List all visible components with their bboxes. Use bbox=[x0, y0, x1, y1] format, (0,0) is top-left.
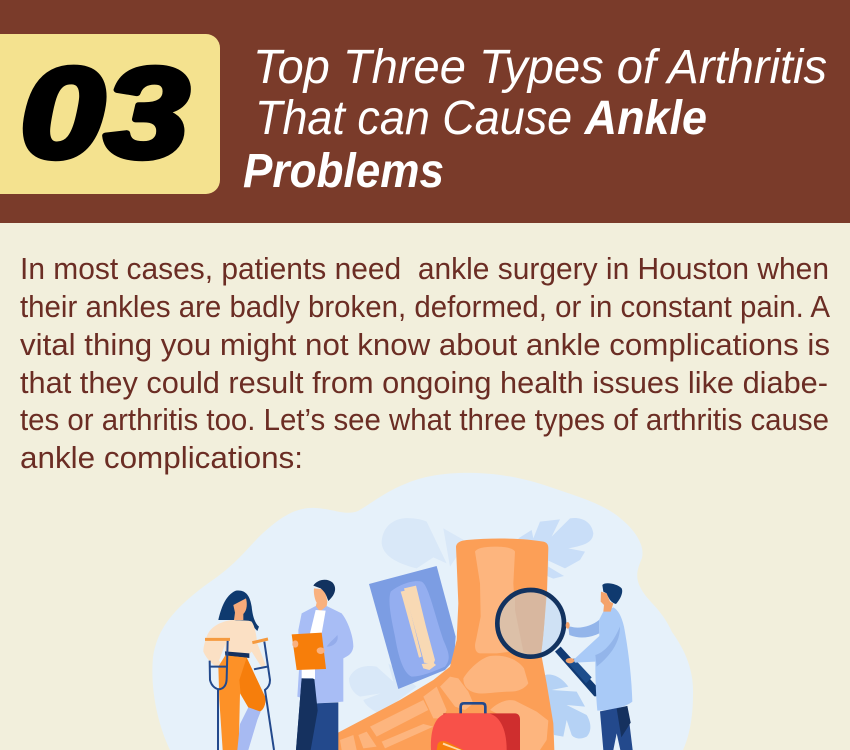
intro paragraph: vital thing you might not know about ankle complications is bbox=[20, 327, 830, 362]
illustration: ankle examination bbox=[152, 473, 693, 750]
x-ray film bbox=[369, 566, 456, 689]
number badge: 03 bbox=[20, 42, 189, 185]
title: That can Cause Ankle bbox=[255, 91, 707, 145]
number badge bbox=[0, 34, 220, 194]
intro paragraph: In most cases, patients need ankle surgery in Houston when bbox=[20, 251, 829, 286]
magnifying glass bbox=[497, 590, 600, 696]
person: doctor with clipboard bbox=[292, 580, 353, 750]
title: Top Three Types of Arthritis bbox=[253, 40, 827, 94]
person: doctor with magnifier bbox=[566, 583, 633, 750]
intro paragraph bbox=[20, 251, 830, 475]
person: patient on crutches bbox=[203, 590, 274, 750]
intro paragraph: ankle complications: bbox=[20, 440, 303, 475]
first-aid bag bbox=[431, 703, 520, 750]
title bbox=[243, 40, 827, 198]
foot, bag, magnifier bbox=[315, 518, 633, 750]
header band bbox=[0, 0, 850, 223]
intro paragraph: that they could result from ongoing health issues like diabe- bbox=[20, 365, 828, 400]
foot bbox=[315, 538, 554, 750]
leaves and x-ray bbox=[349, 518, 467, 714]
title: Problems bbox=[243, 144, 444, 198]
intro paragraph: tes or arthritis too. Let’s see what three types of arthritis cause bbox=[20, 402, 829, 437]
background blob bbox=[152, 473, 693, 750]
intro paragraph: their ankles are badly broken, deformed, or in constant pain. A bbox=[20, 289, 830, 324]
people on left bbox=[203, 580, 353, 750]
